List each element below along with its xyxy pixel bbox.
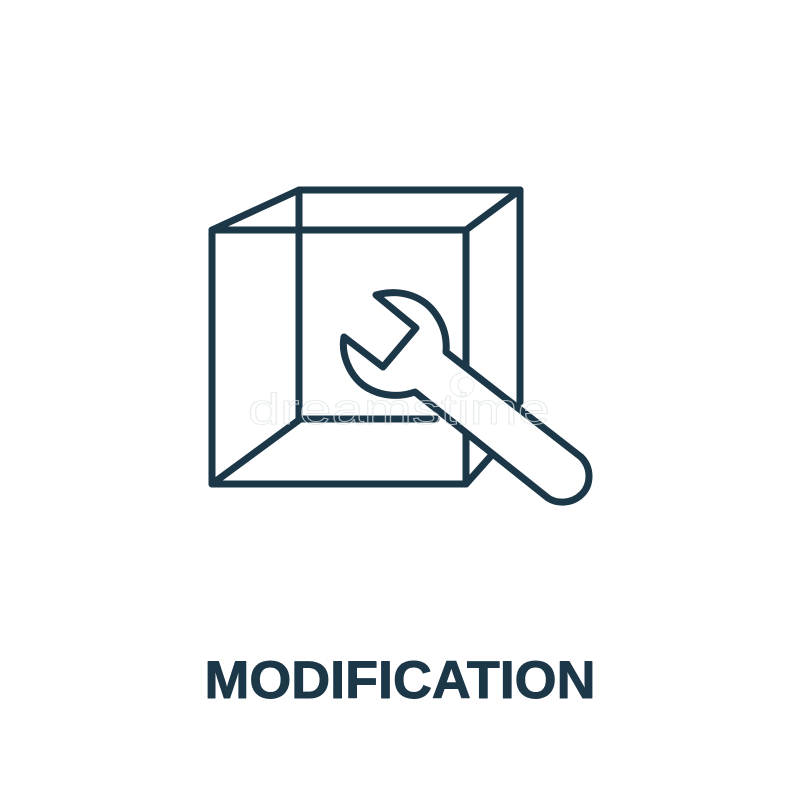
cube: front face <box>212 230 466 484</box>
title: MODIFICATION <box>204 651 596 710</box>
cube: connecting edges <box>212 190 520 484</box>
icon: wrench <box>343 293 589 502</box>
watermark: spiral logo <box>450 373 474 397</box>
watermark: text: dreamstime <box>248 385 550 434</box>
icon: wireframe cube with wrench <box>212 190 589 502</box>
cube: back face edges <box>299 190 520 419</box>
watermark <box>248 373 550 434</box>
